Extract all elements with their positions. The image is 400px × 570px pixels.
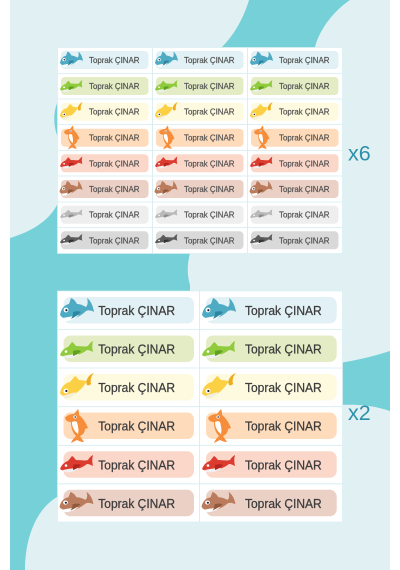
sheet: six copies: [58, 48, 342, 254]
label row 1 col 3: [250, 51, 338, 69]
large label row 1 col 1: Toprak ÇINAR: [98, 303, 175, 318]
large label row 4 col 2: [206, 409, 337, 443]
large label row 5 col 2: [202, 451, 337, 478]
label row 4 col 1: [61, 126, 148, 150]
label row 5 col 1: Toprak ÇINAR: [89, 158, 140, 168]
large label row 6 col 2: Toprak ÇINAR: [245, 496, 322, 511]
large label row 6 col 2: [202, 490, 337, 516]
label row 1 col 2: [155, 51, 244, 69]
label row 5 col 3: [250, 154, 338, 172]
large label row 3 col 2: Toprak ÇINAR: [245, 380, 322, 395]
label row 3 col 2: [155, 102, 244, 121]
label row 8 col 2: [155, 231, 244, 249]
large label row 6 col 1: Toprak ÇINAR: [98, 496, 175, 511]
label row 2 col 1: [60, 77, 148, 95]
label row 7 col 2: [155, 206, 244, 224]
label row 4 col 2: [156, 126, 244, 150]
teal right band: [340, 351, 390, 411]
label row 6 col 2: [154, 180, 244, 198]
large label row 4 col 1: Toprak ÇINAR: [98, 418, 175, 434]
label row 7 col 3: [250, 206, 338, 224]
label row 3 col 1: [60, 102, 148, 121]
label row 7 col 1: Toprak ÇINAR: [89, 210, 140, 220]
label row 2 col 3: Toprak ÇINAR: [279, 81, 330, 91]
label row 1 col 2: Toprak ÇINAR: [184, 55, 234, 65]
large label row 3 col 1: Toprak ÇINAR: [98, 380, 175, 395]
label row 2 col 1: Toprak ÇINAR: [89, 81, 140, 91]
label row 5 col 2: [155, 154, 244, 172]
label row 4 col 3: [251, 126, 338, 150]
large label row 3 col 2: [202, 373, 337, 400]
quantity x2: x2: [348, 401, 371, 425]
large label row 1 col 2: Toprak ÇINAR: [245, 303, 322, 318]
large label row 6 col 1: [60, 490, 194, 516]
label row 3 col 3: Toprak ÇINAR: [279, 107, 330, 117]
label row 7 col 1: [60, 206, 148, 224]
label row 6 col 3: Toprak ÇINAR: [279, 184, 330, 194]
large label row 3 col 1: [60, 373, 194, 400]
large label row 2 col 1: Toprak ÇINAR: [98, 342, 175, 356]
large label row 5 col 2: Toprak ÇINAR: [245, 457, 322, 472]
large label row 5 col 1: Toprak ÇINAR: [98, 457, 175, 472]
label row 4 col 3: Toprak ÇINAR: [279, 133, 330, 143]
large label row 2 col 2: [202, 336, 337, 362]
label row 5 col 1: [60, 154, 148, 172]
large label row 2 col 1: [60, 336, 194, 362]
label row 6 col 1: Toprak ÇINAR: [89, 184, 140, 194]
large label row 1 col 2: [202, 297, 337, 324]
large label row 4 col 2: Toprak ÇINAR: [245, 418, 322, 434]
label row 3 col 2: Toprak ÇINAR: [184, 107, 234, 117]
large label row 1 col 1: [60, 297, 194, 324]
sheet: two copies: [58, 291, 342, 522]
label row 1 col 1: [60, 51, 148, 69]
label row 8 col 3: [250, 231, 338, 249]
large label row 2 col 2: Toprak ÇINAR: [245, 342, 322, 356]
label row 2 col 2: Toprak ÇINAR: [184, 81, 234, 91]
large label row 5 col 1: [60, 451, 194, 478]
label row 8 col 3: Toprak ÇINAR: [279, 235, 330, 245]
label row 5 col 2: Toprak ÇINAR: [184, 158, 234, 168]
label row 8 col 1: Toprak ÇINAR: [89, 235, 140, 245]
label row 8 col 1: [60, 231, 148, 249]
label row 5 col 3: Toprak ÇINAR: [279, 158, 330, 168]
label row 6 col 1: [60, 180, 148, 198]
label row 4 col 1: Toprak ÇINAR: [89, 133, 140, 143]
label row 7 col 2: Toprak ÇINAR: [184, 210, 234, 220]
label row 6 col 3: [250, 180, 338, 198]
label row 3 col 3: [250, 102, 338, 121]
label row 6 col 2: Toprak ÇINAR: [184, 184, 234, 194]
label row 4 col 2: Toprak ÇINAR: [184, 133, 234, 143]
label row 1 col 3: Toprak ÇINAR: [279, 55, 330, 65]
quantity x6: x6: [348, 142, 371, 166]
label row 2 col 3: [250, 77, 338, 95]
label row 7 col 3: Toprak ÇINAR: [279, 210, 330, 220]
large label row 4 col 1: [64, 409, 194, 443]
label row 3 col 1: Toprak ÇINAR: [89, 107, 140, 117]
label row 8 col 2: Toprak ÇINAR: [184, 235, 234, 245]
label row 1 col 1: Toprak ÇINAR: [89, 55, 140, 65]
label row 2 col 2: [155, 77, 244, 95]
teal bulge: [54, 101, 58, 138]
